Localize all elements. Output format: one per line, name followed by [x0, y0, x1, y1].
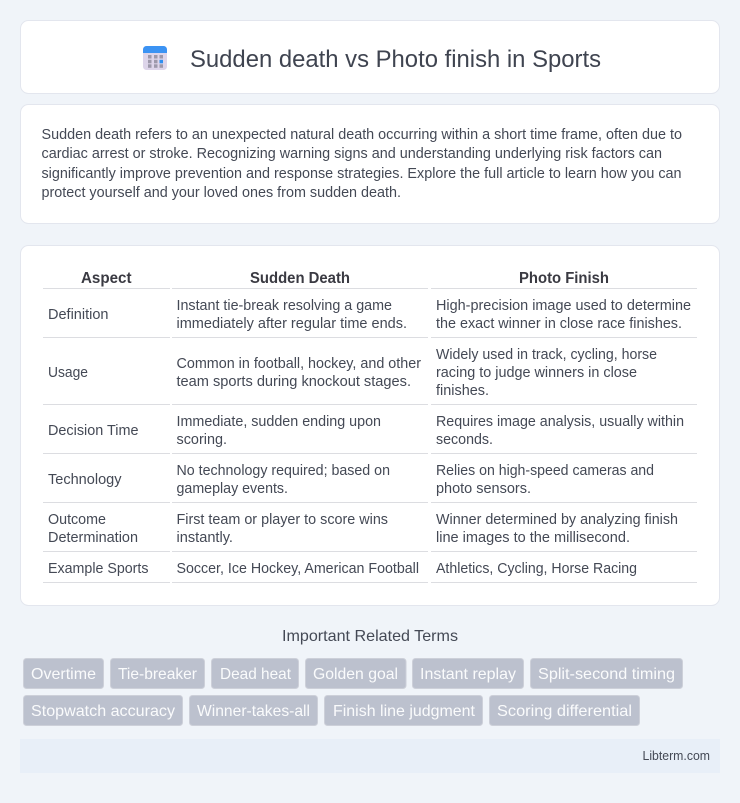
row: usage: Widely used in track, cycling, horse	[436, 347, 657, 363]
row: outcome determination	[48, 512, 678, 546]
tag: Split-second timing	[530, 658, 682, 688]
tag list: related terms	[24, 658, 682, 726]
row: decision time	[48, 414, 684, 448]
icon: calendar	[143, 46, 167, 70]
row: definition: Definition	[48, 307, 108, 323]
tag: Finish line judgment: Finish line judgment	[333, 703, 476, 720]
tag: Winner-takes-all: Winner-takes-all	[197, 703, 310, 720]
tag: Finish line judgment	[324, 696, 482, 726]
row: outcome determination: Outcome	[48, 512, 106, 528]
row: definition: immediately after regular time ends.	[176, 316, 407, 332]
row: decision time: Immediate, sudden ending upon	[176, 414, 381, 430]
panel: intro paragraph	[20, 104, 720, 224]
table header row: Photo Finish	[519, 270, 609, 287]
row: technology: Relies on high-speed cameras and	[436, 463, 654, 479]
row: example sports	[48, 561, 637, 577]
row: usage: finishes.	[436, 383, 489, 399]
row: technology: photo sensors.	[436, 481, 531, 497]
text block: intro	[42, 127, 682, 201]
row: definition	[48, 298, 691, 332]
text block: intro: Sudden death refers to an unexpected natural death occurring within a short time frame, often due to	[42, 127, 682, 143]
tag: Golden goal: Golden goal	[313, 666, 398, 683]
row: outcome determination: First team or player to score wins	[176, 512, 388, 528]
row: decision time: Decision Time	[48, 423, 138, 439]
tag: Overtime	[24, 658, 104, 688]
tag: Tie-breaker: Tie-breaker	[118, 666, 197, 683]
tag: Winner-takes-all	[190, 696, 318, 726]
table header row: Aspect	[81, 270, 132, 287]
row: example sports: Athletics, Cycling, Horse Racing	[436, 561, 637, 577]
row: example sports: Soccer, Ice Hockey, American Football	[176, 561, 419, 577]
tag: Scoring differential: Scoring differential	[497, 703, 632, 720]
row: usage: team sports during knockout stages.	[176, 374, 411, 390]
row: outcome determination: instantly.	[176, 530, 233, 546]
row: technology	[48, 463, 654, 497]
row: technology: Technology	[48, 472, 122, 488]
tag: Dead heat	[212, 658, 298, 688]
tag: Tie-breaker	[110, 658, 204, 688]
row: definition: Instant tie-break resolving a game	[176, 298, 392, 314]
row: definition: High-precision image used to determine	[436, 298, 691, 314]
row: usage: Common in football, hockey, and other	[176, 356, 421, 372]
text block: intro: cardiac arrest or stroke. Recognizing warning signs and understanding underlying risk factors can	[42, 146, 662, 162]
tag: Stopwatch accuracy: Stopwatch accuracy	[31, 703, 175, 720]
tag: Instant replay: Instant replay	[420, 666, 516, 683]
footer	[20, 739, 720, 773]
panel: header	[20, 20, 720, 94]
row: definition: the exact winner in close race finishes.	[436, 316, 682, 332]
row: outcome determination: Winner determined by analyzing finish	[436, 512, 678, 528]
footer: Libterm.com	[642, 749, 710, 763]
row: decision time: scoring.	[176, 432, 227, 448]
row: usage: racing to judge winners in close	[436, 365, 637, 381]
tag: Instant replay	[412, 658, 524, 688]
row: outcome determination: Determination	[48, 530, 138, 546]
row: outcome determination: line images to the millisecond.	[436, 530, 630, 546]
tag: Scoring differential	[490, 696, 640, 726]
row: technology: No technology required; based on	[176, 463, 390, 479]
tag: Dead heat: Dead heat	[220, 666, 292, 683]
title: Sudden death vs Photo finish in Sports	[190, 46, 601, 73]
text block: intro: protect yourself and your loved ones from sudden death.	[42, 185, 401, 201]
tag: Split-second timing: Split-second timing	[538, 666, 675, 683]
row: decision time: seconds.	[436, 432, 493, 448]
row: usage	[48, 347, 657, 399]
panel: comparison table	[20, 246, 720, 606]
text block: intro: significantly improve prevention and response strategies. Explore the full article to learn how you can	[42, 166, 682, 182]
row: example sports: Example Sports	[48, 561, 148, 577]
row: usage: Usage	[48, 365, 88, 381]
heading: related terms: Important Related Terms	[282, 628, 458, 645]
row: technology: gameplay events.	[176, 481, 288, 497]
row: decision time: Requires image analysis, usually within	[436, 414, 684, 430]
tag: Golden goal	[306, 658, 406, 688]
tag: Overtime: Overtime	[31, 666, 96, 683]
tag: Stopwatch accuracy	[24, 696, 182, 726]
table header row: Sudden Death	[250, 270, 350, 287]
table header row	[81, 270, 609, 287]
